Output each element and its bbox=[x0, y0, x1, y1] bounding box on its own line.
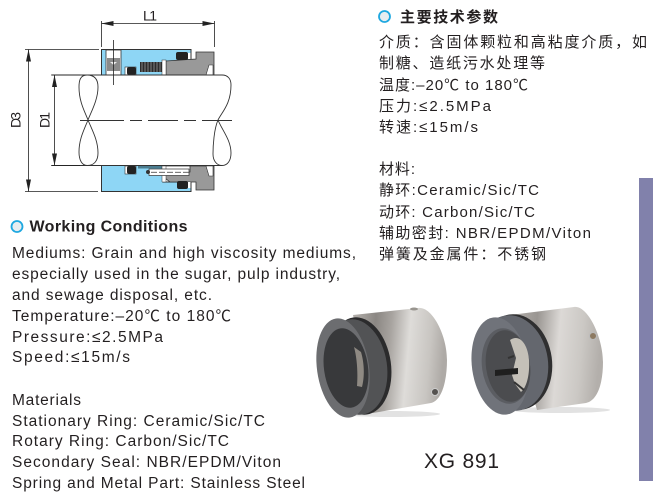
text block: chinese materials: 动环: Carbon/Sic/TC bbox=[379, 204, 535, 221]
text block: chinese conditions bbox=[379, 34, 647, 136]
text block: materials: Spring and Metal Part: Stainless Steel bbox=[12, 475, 305, 492]
product label: XG 891 bbox=[424, 450, 499, 473]
text block: materials bbox=[12, 392, 305, 492]
shaft bbox=[52, 75, 231, 166]
o-ring lower left bbox=[125, 166, 136, 174]
pin bbox=[146, 169, 189, 176]
centre line bbox=[80, 120, 232, 122]
text block: working conditions bbox=[12, 245, 356, 366]
heading: chinese technical parameters: 主要技术参数 bbox=[400, 8, 498, 26]
ring gap lower bbox=[206, 166, 213, 176]
text block: chinese materials: 弹簧及金属件：不锈钢 bbox=[379, 246, 546, 263]
text block: chinese conditions: 转速:≤15m/s bbox=[379, 119, 478, 136]
text block: materials: Secondary Seal: NBR/EPDM/Viton bbox=[12, 454, 281, 471]
dimension D1 bbox=[36, 75, 80, 166]
product photo: left seal bbox=[310, 308, 447, 421]
o-ring upper right bbox=[176, 52, 190, 60]
side panel bbox=[639, 178, 653, 481]
text block: chinese materials bbox=[379, 161, 591, 263]
dimension L1: L1 bbox=[143, 8, 157, 24]
dimension L1 bbox=[102, 8, 214, 47]
text block: materials: Materials bbox=[12, 392, 81, 409]
text block: materials: Rotary Ring: Carbon/Sic/TC bbox=[12, 433, 229, 450]
text block: working conditions: especially used in the sugar, pulp industry, bbox=[12, 266, 340, 283]
screw axis bbox=[112, 40, 114, 85]
text block: working conditions: and sewage disposal, etc. bbox=[12, 287, 212, 304]
heading: working conditions: Working Conditions bbox=[30, 218, 188, 236]
text block: chinese materials: 静环:Ceramic/Sic/TC bbox=[379, 182, 539, 199]
text block: chinese conditions: 介质：含固体颗粒和高粘度介质，如 bbox=[379, 34, 647, 51]
text block: chinese conditions: 制糖、造纸污水处理等 bbox=[379, 54, 545, 72]
text block: working conditions: Temperature:–20℃ to 180℃ bbox=[12, 308, 231, 325]
icon: heading bullet bbox=[12, 221, 22, 232]
dimension D3: D3 bbox=[8, 112, 24, 128]
cross-section diagram bbox=[8, 8, 232, 192]
stationary housing lower bbox=[102, 166, 191, 192]
ring gap bbox=[206, 65, 213, 75]
product photo: right seal bbox=[465, 307, 610, 418]
text block: working conditions: Mediums: Grain and high viscosity mediums, bbox=[12, 245, 356, 262]
o-ring upper left bbox=[125, 67, 136, 75]
text block: chinese materials: 辅助密封: NBR/EPDM/Viton bbox=[379, 225, 591, 242]
dimension D1: D1 bbox=[36, 112, 52, 128]
text block: chinese materials: 材料: bbox=[379, 161, 415, 178]
text block: materials: Stationary Ring: Ceramic/Sic/TC bbox=[12, 413, 265, 430]
text block: chinese conditions: 温度:–20℃ to 180℃ bbox=[379, 77, 528, 94]
rotary ring upper bbox=[166, 52, 214, 75]
set screw bbox=[106, 50, 121, 75]
o-ring lower right bbox=[177, 181, 190, 189]
rotary ring lower bbox=[165, 166, 214, 190]
text block: working conditions: Pressure:≤2.5MPa bbox=[12, 329, 163, 346]
text block: chinese conditions: 压力:≤2.5MPa bbox=[379, 98, 492, 115]
white pocket lower bbox=[162, 166, 166, 182]
text block: working conditions: Speed:≤15m/s bbox=[12, 349, 130, 366]
icon: chinese heading bullet bbox=[379, 11, 390, 22]
stationary housing upper bbox=[102, 50, 191, 75]
dimension D3 bbox=[8, 50, 99, 192]
spring bbox=[140, 62, 166, 72]
